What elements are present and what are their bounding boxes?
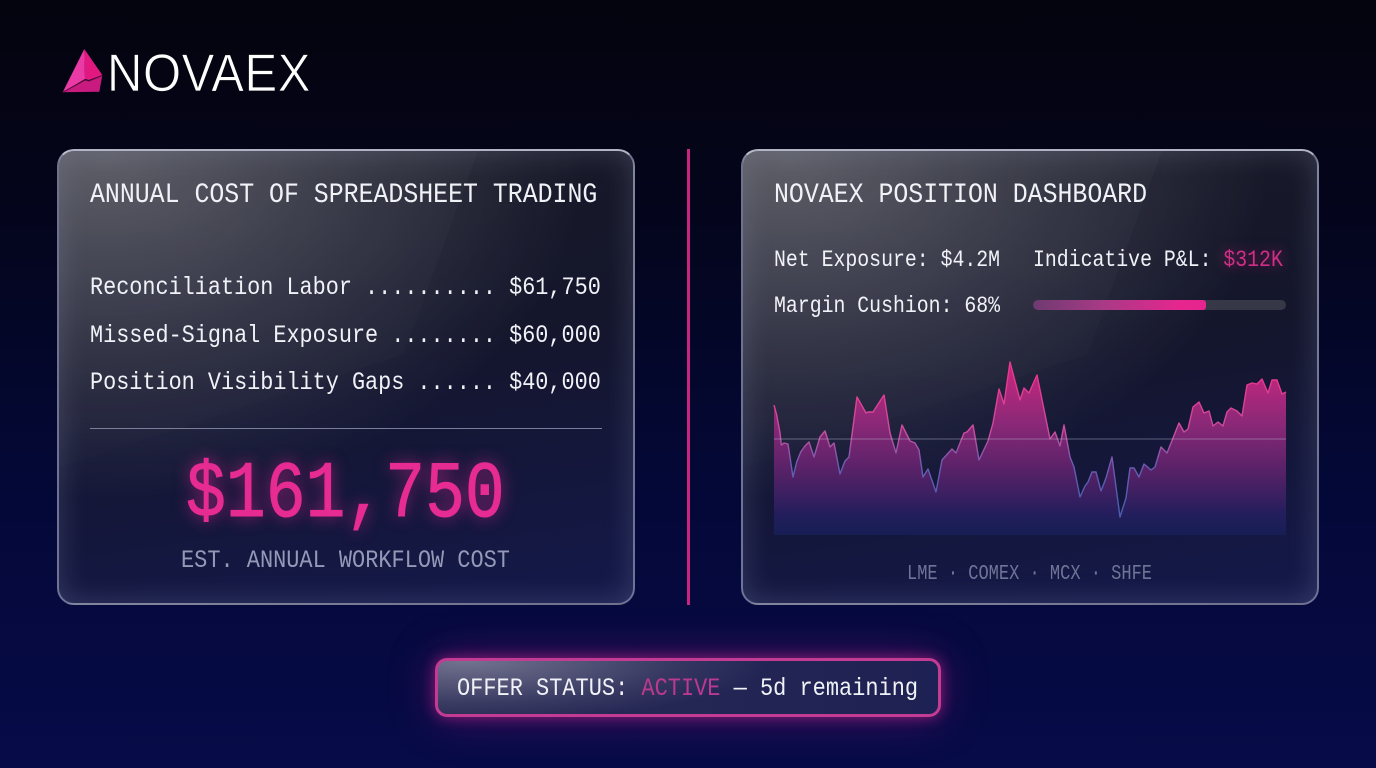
total cost caption: EST. ANNUAL WORKFLOW COST — [181, 546, 510, 575]
status pill: offer status — [435, 658, 941, 717]
total divider — [90, 428, 602, 429]
exchange list: LME · COMEX · MCX · SHFE — [907, 563, 1152, 586]
cost row: position visibility gaps: Position Visibility Gaps ...... $40,000 — [90, 368, 601, 397]
metric: margin cushion: Margin Cushion: 68% — [774, 293, 1000, 319]
logo: NOVAEX — [62, 44, 311, 103]
wordmark: NOVAEX — [107, 44, 311, 103]
status text: OFFER STATUS: ACTIVE — 5d remaining — [457, 674, 918, 703]
vertical divider — [687, 149, 690, 605]
heading: position dashboard: NOVAEX POSITION DASHBOARD — [774, 180, 1147, 211]
panel: annual cost of spreadsheet trading — [57, 149, 635, 605]
heading: annual cost: ANNUAL COST OF SPREADSHEET TRADING — [90, 180, 597, 211]
panel: position dashboard — [741, 149, 1319, 605]
total cost figure: $161,750 — [186, 450, 505, 541]
margin progress bar — [1033, 300, 1286, 310]
metric: net exposure: Net Exposure: $4.2M — [774, 247, 1000, 273]
metric: indicative P&L: Indicative P&L: $312K — [1033, 247, 1283, 273]
icon: pink faceted pyramid — [62, 49, 102, 93]
cost row: missed-signal exposure: Missed-Signal Exposure ........ $60,000 — [90, 321, 601, 350]
cost row: reconciliation labor: Reconciliation Labor .......... $61,750 — [90, 273, 601, 302]
